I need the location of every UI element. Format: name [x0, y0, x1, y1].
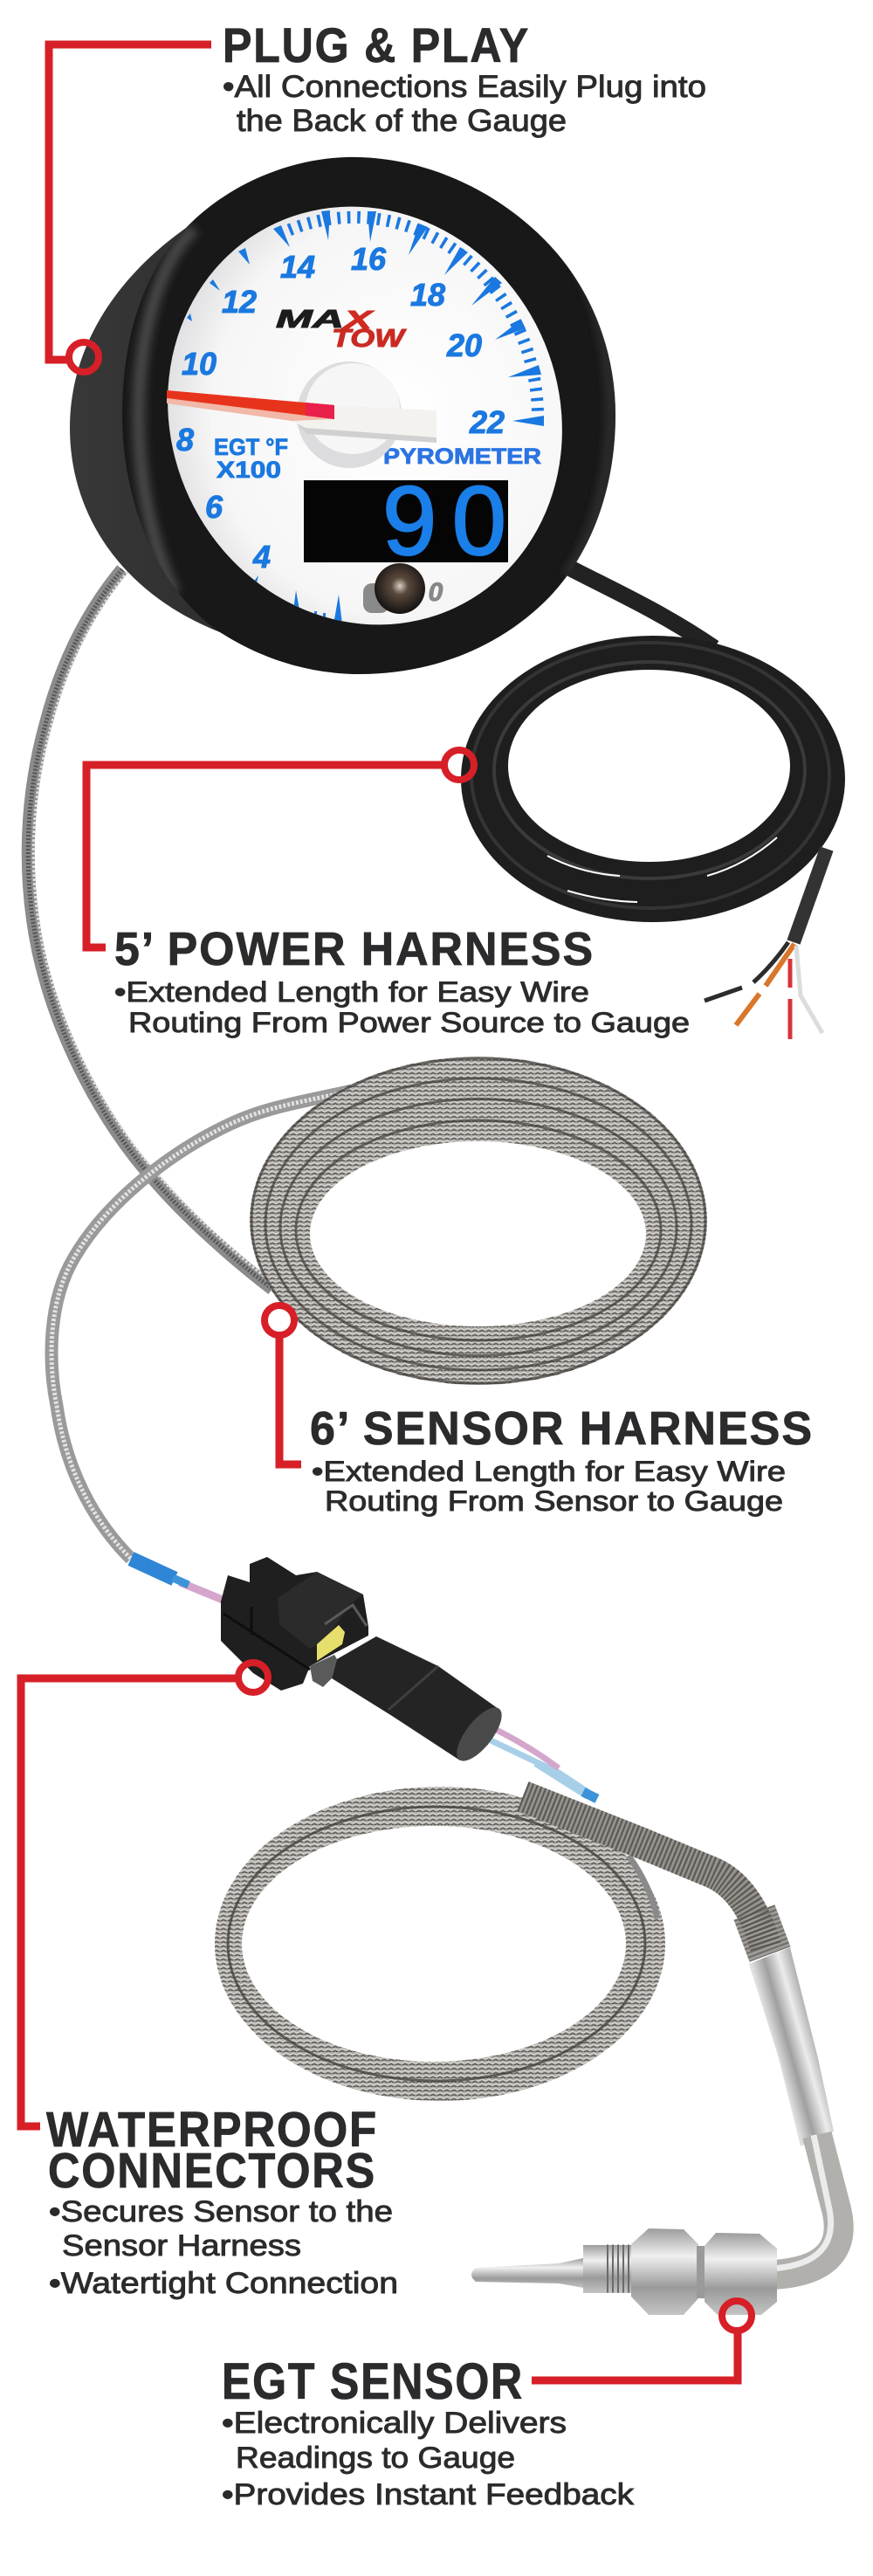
bullet text: the Back of the Gauge [237, 104, 567, 138]
leader line [86, 750, 474, 947]
gauge dial [168, 206, 562, 625]
coil: sensor harness [250, 1057, 707, 1385]
sensor wires [535, 1764, 597, 1799]
dial unit label: EGT °F [214, 434, 288, 460]
connector housing [221, 1557, 368, 1691]
minor tick marks [284, 217, 538, 421]
callout: EGT sensor [222, 2301, 752, 2511]
heading: 5’ POWER HARNESS [114, 923, 595, 975]
connector sensor-side wires [476, 1722, 588, 1792]
cable: sensor harness lead [52, 1087, 367, 1559]
callout: power harness [86, 750, 690, 1038]
dial numbers: 14 [280, 249, 315, 285]
threads [583, 2245, 637, 2293]
dial numbers: 16 [351, 241, 387, 277]
spring conduit [523, 1796, 770, 1954]
heading [46, 2102, 378, 2199]
heading: WATERPROOF [46, 2102, 378, 2158]
probe tip [471, 2258, 583, 2288]
braid loop: EGT sensor [215, 1787, 665, 2101]
heading: CONNECTORS [48, 2143, 376, 2199]
bullet text: •Electronically Delivers [222, 2407, 567, 2440]
dial numbers: 12 [222, 284, 257, 320]
collar [697, 2246, 710, 2298]
bullet text [223, 70, 706, 138]
heat shrink and pink wire [131, 1559, 223, 1600]
dial unit label: X100 [217, 457, 281, 483]
leader line [21, 1663, 268, 2126]
power wire ends [705, 849, 827, 1039]
heading: PLUG & PLAY [223, 17, 530, 72]
steel tube [749, 1947, 834, 2146]
digital display [304, 480, 508, 562]
bent tube [773, 2135, 839, 2275]
adjustment knob [363, 563, 425, 614]
cable: power harness lead [569, 568, 714, 648]
leader line [532, 2301, 752, 2380]
bullet text: Sensor Harness [62, 2229, 301, 2263]
bullet text: •All Connections Easily Plug into [223, 70, 706, 104]
bullet text: •Provides Instant Feedback [222, 2478, 635, 2511]
callout: sensor harness [265, 1305, 814, 1517]
bullet text: •Watertight Connection [49, 2267, 398, 2300]
EGT sensor probe [471, 1764, 839, 2315]
compression nut [705, 2233, 777, 2315]
dial name: PYROMETER [383, 444, 541, 469]
dial numbers: 18 [410, 277, 445, 313]
bullet text [312, 1456, 786, 1517]
dial unit label [215, 438, 288, 479]
connector rim [310, 1655, 337, 1687]
bullet text: •Secures Sensor to the [49, 2195, 393, 2228]
bullet text: Readings to Gauge [236, 2442, 515, 2475]
heading: EGT SENSOR [222, 2353, 524, 2410]
gauge body [70, 228, 375, 632]
dial numbers: 8 [176, 422, 194, 458]
bullet text [49, 2195, 398, 2300]
connector yellow seal [317, 1625, 345, 1661]
cable: braided gauge harness [28, 569, 276, 1289]
needle hub [297, 362, 402, 468]
heading: 6’ SENSOR HARNESS [310, 1402, 814, 1455]
dial numbers: 10 [182, 346, 217, 382]
thin sensor lead [629, 1856, 657, 1918]
coil: power harness [461, 636, 845, 922]
bullet text: •Extended Length for Easy Wire [312, 1456, 786, 1487]
logo [276, 309, 407, 348]
dial numbers: 20 [446, 327, 482, 363]
dial numbers: 0 [429, 578, 443, 607]
dial numbers: 4 [252, 539, 271, 575]
bullet text: Routing From Sensor to Gauge [325, 1485, 783, 1517]
connector mating half [332, 1636, 498, 1760]
gauge [70, 157, 615, 674]
logo: X [341, 307, 375, 334]
needle pointer [167, 390, 436, 443]
waterproof connector [221, 1557, 588, 1792]
dial numbers: 6 [205, 489, 223, 525]
leader line [49, 45, 211, 372]
hex nut [631, 2228, 698, 2315]
connector end face [449, 1701, 510, 1767]
major tick marks [187, 210, 544, 624]
bullet text: •Extended Length for Easy Wire [114, 976, 589, 1008]
bullet text [222, 2407, 635, 2511]
dial numbers: 22 [469, 404, 505, 440]
digital display: 90 [382, 466, 506, 575]
logo: MA [276, 306, 344, 334]
dial numbers [176, 241, 505, 607]
callout: plug and play [49, 17, 706, 372]
bullet text: Routing From Power Source to Gauge [128, 1007, 690, 1038]
leader line [265, 1305, 301, 1464]
logo: TOW [332, 325, 407, 353]
gauge bezel [122, 157, 615, 674]
callout: waterproof connectors [21, 1663, 398, 2300]
bullet text [114, 976, 690, 1038]
